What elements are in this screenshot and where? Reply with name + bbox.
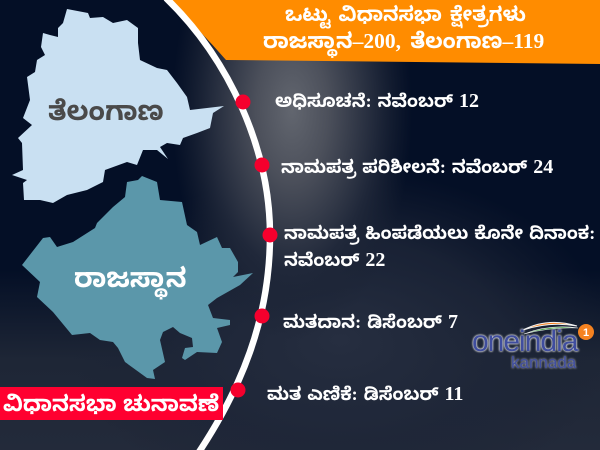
item: withdrawal [284,223,595,271]
label: Telangana: ತೆಲಂಗಾಣ [48,96,164,126]
item: scrutiny: ನಾಮಪತ್ರ ಪರಿಶೀಲನೆ: ನವೆಂಬರ್ 24 [281,156,553,178]
red banner: ವಿಧಾನಸಭಾ ಚುನಾವಣೆ [3,391,219,416]
heading: ರಾಜಸ್ಥಾನ–200, ತೆಲಂಗಾಣ–119 [263,29,544,53]
logo subtitle: kannada [511,353,576,372]
item: notification: ಅಧಿಸೂಚನೆ: ನವೆಂಬರ್ 12 [275,90,479,112]
label: Rajasthan: ರಾಜಸ್ಥಾನ [74,263,187,293]
item: withdrawal: ನಾಮಪತ್ರ ಹಿಂಪಡೆಯಲು ಕೊನೇ ದಿನಾಂಕ: [284,223,595,243]
logo flag swoosh and badge [523,322,594,340]
heading: ಒಟ್ಟು ವಿಧಾನಸಭಾ ಕ್ಷೇತ್ರಗಳು [285,4,526,26]
logo flag swoosh and badge: 1 [583,327,589,339]
item: withdrawal: ನವೆಂಬರ್ 22 [284,249,385,271]
heading [263,4,544,58]
logo wordmark: oneindia [472,325,577,358]
logo: oneindia kannada [471,322,594,372]
item: counting: ಮತ ಎಣಿಕೆ: ಡಿಸೆಂಬರ್ 11 [267,383,463,405]
item: polling: ಮತದಾನ: ಡಿಸೆಂಬರ್ 7 [283,311,458,333]
